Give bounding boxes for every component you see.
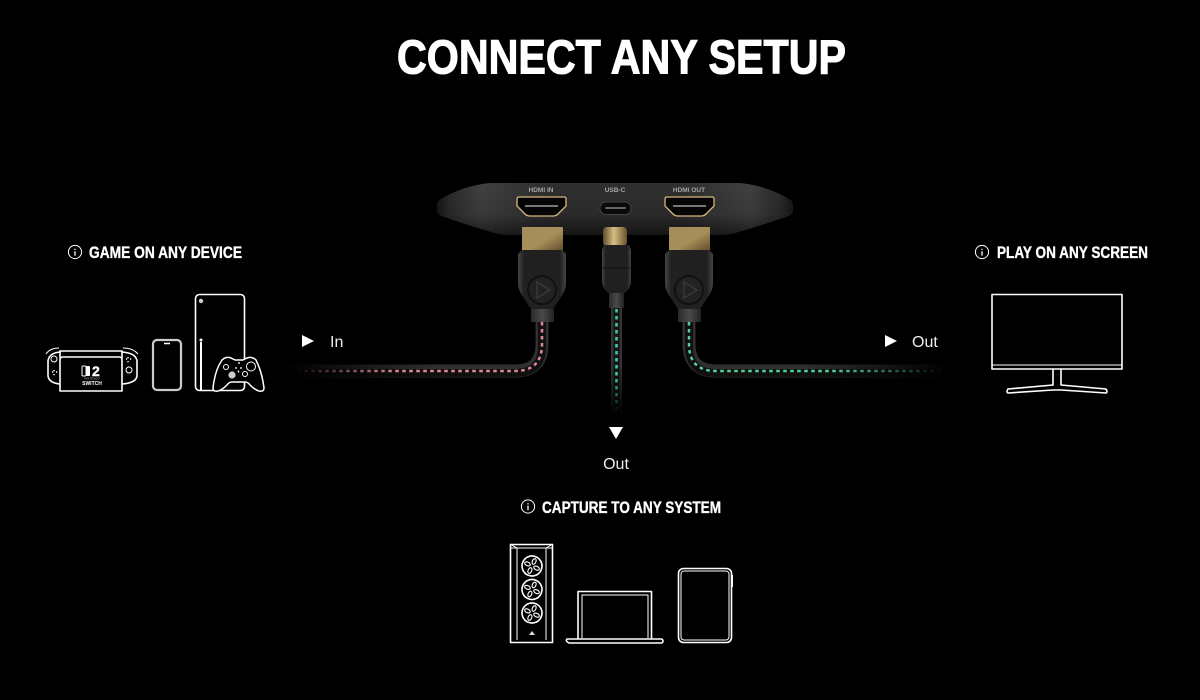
- fan 3: [519, 600, 545, 626]
- label: right Out: Out: [912, 334, 938, 351]
- Switch wordmark: SWITCH: [82, 381, 102, 387]
- fan 2: [519, 576, 545, 603]
- HDMI in port: [517, 197, 566, 216]
- Nintendo wordmark: NINTENDO: [84, 376, 100, 380]
- label: down Out: Out: [603, 456, 629, 473]
- port label: HDMI IN: HDMI IN: [529, 187, 554, 194]
- icon: Nintendo Switch 2: [46, 348, 138, 391]
- title: CONNECT ANY SETUP: [397, 32, 846, 84]
- icon: phone: [153, 340, 181, 390]
- icon: Xbox console: [196, 294, 244, 390]
- arrow: In: [302, 335, 314, 347]
- cable: HDMI out (green): [689, 320, 950, 373]
- icon: desktop PC tower: [510, 544, 553, 642]
- capture card dock: [437, 183, 793, 235]
- icon: laptop: [566, 592, 663, 643]
- port label: USB-C: USB-C: [605, 187, 626, 194]
- arrow: right Out: [885, 335, 897, 347]
- fan 1: [519, 553, 545, 579]
- USB-C plug: [602, 227, 631, 308]
- label: In: In: [330, 334, 343, 351]
- Switch 2 numeral: 2: [92, 363, 100, 379]
- icon: tablet: [678, 568, 732, 642]
- USB-C port: [600, 202, 631, 214]
- cable: USB-C (teal): [611, 305, 622, 415]
- heading: capture to any system: CAPTURE TO ANY SYSTEM: [542, 498, 721, 517]
- HDMI in plug: [518, 227, 566, 322]
- HDMI out port: [665, 197, 714, 216]
- heading: play on any screen: PLAY ON ANY SCREEN: [997, 243, 1148, 262]
- port label: HDMI OUT: HDMI OUT: [673, 187, 705, 194]
- icon: Xbox controller: [213, 357, 264, 391]
- cable: HDMI in (red): [285, 320, 542, 373]
- heading: game on any device: GAME ON ANY DEVICE: [89, 243, 242, 262]
- arrow: down Out: [609, 427, 623, 439]
- HDMI out plug: [665, 227, 713, 322]
- icon: monitor: [992, 294, 1122, 393]
